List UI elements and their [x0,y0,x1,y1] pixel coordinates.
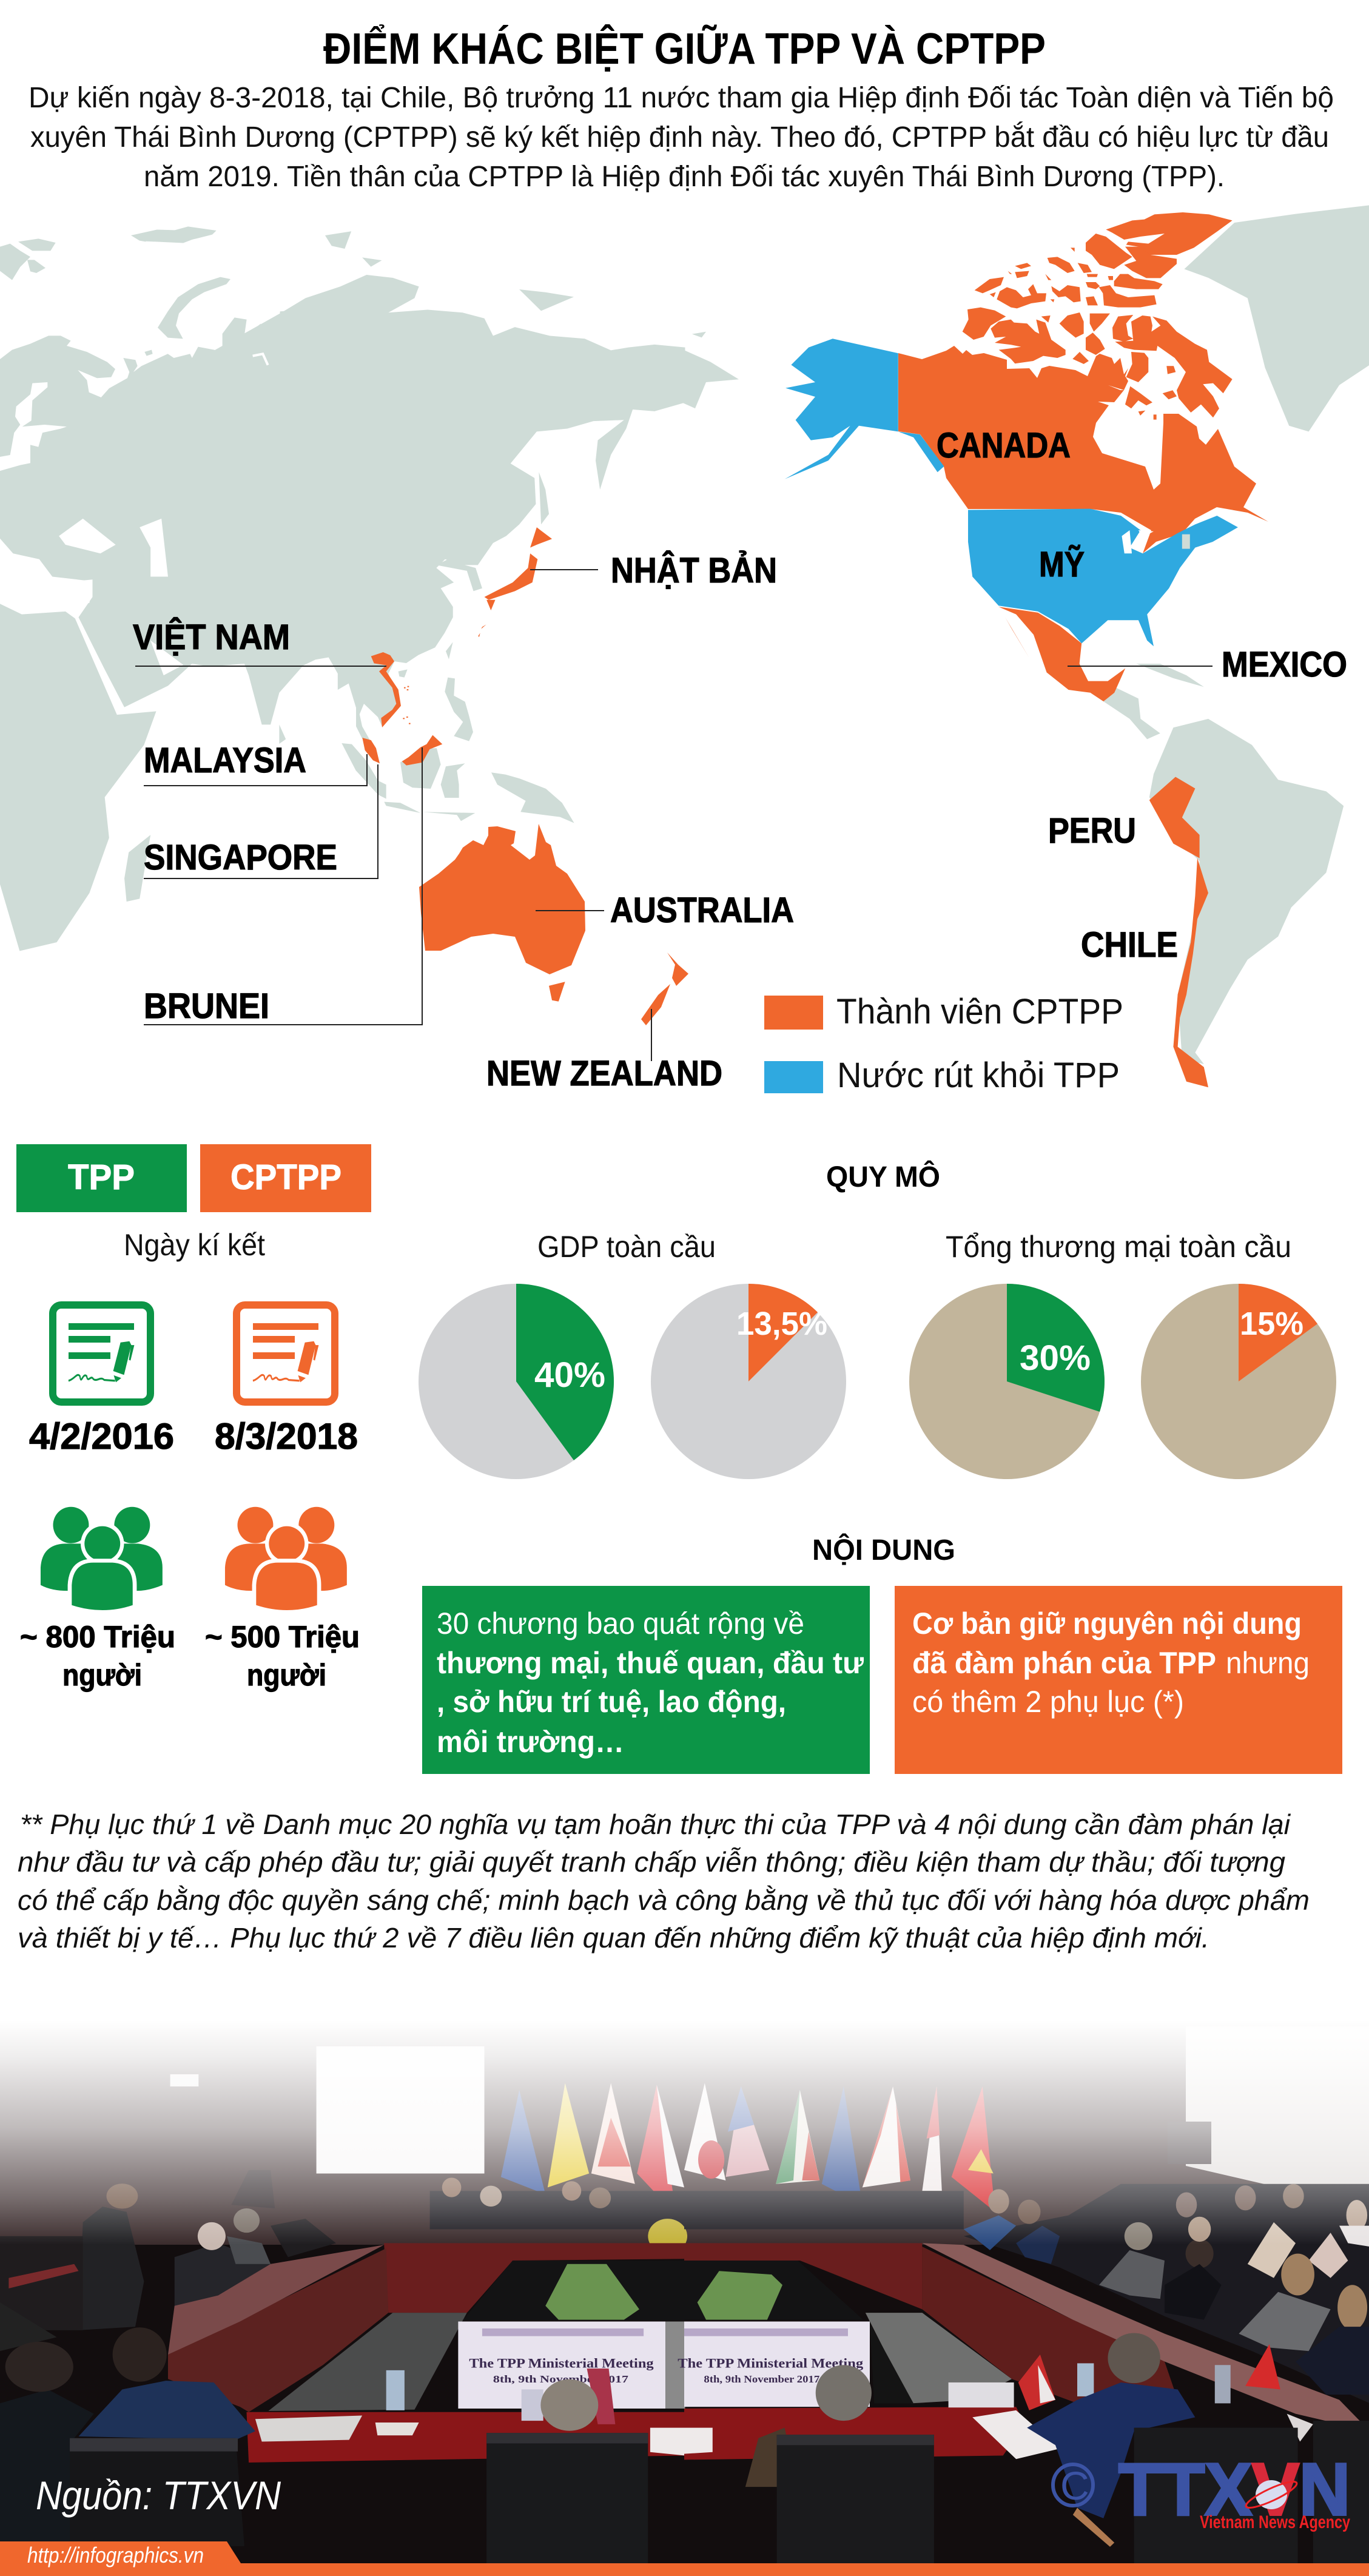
logo: copyright mark: C [1060,2463,1089,2508]
intro text block: năm 2019. Tiền thân của CPTPP là Hiệp định Đối tác xuyên Thái Bình Dương (TPP). [144,161,1225,193]
photo: delegate in blue suit [1027,2333,1195,2518]
country label: Peru: PERU [1048,811,1136,851]
TPP population: ~ 800 Triệu [20,1620,175,1654]
pie chart: TPP trade 30% [909,1284,1105,1479]
footnote text block: như đầu tư và cấp phép đầu tư; giải quyết tranh chấp viễn thông; điều kiện tham dự thầu; đối tượng [18,1846,1285,1878]
country label: Mexico: MEXICO [1222,645,1347,684]
intro text block: Dự kiến ngày 8-3-2018, tại Chile, Bộ trưởng 11 nước tham gia Hiệp định Đối tác Toàn diện và Tiến bộ [29,82,1334,114]
logo: globe [1243,2477,1299,2512]
photo: meeting banner right: The TPP Ministerial Meeting [678,2356,864,2371]
map: Canada mainland [898,346,1268,553]
CPTPP signing date: 8/3/2018 [215,1416,358,1457]
photo: grey-haired delegate and chair [486,2379,648,2563]
photo: back table face right [684,2243,922,2309]
map: Greenland and the American land [682,205,1369,1064]
country label: Chile: CHILE [1081,925,1178,965]
header: TPP [16,1144,187,1212]
photo: card, flags and bottles near table right [684,2344,1313,2459]
heading: Nội dung: NỘI DUNG [812,1533,955,1566]
country label: Singapore: SINGAPORE [144,838,337,877]
pie chart: TPP GDP 40%: 40% [534,1355,605,1395]
header: CPTPP: CPTPP [230,1158,341,1197]
signing date heading: Ngày kí kết [124,1228,265,1262]
pie chart: TPP GDP 40% [419,1284,614,1479]
content box: TPP: môi trường… [437,1725,624,1759]
pie chart: CPTPP trade 15%: 15% [1240,1306,1303,1342]
TPP signing date: 4/2/2016 [29,1416,174,1457]
content box: TPP: , sở hữu trí tuệ, lao động, [437,1685,786,1719]
photo: delegates right [964,2184,1369,2403]
photo: centre planter right [684,2261,863,2320]
country label: Australia: AUSTRALIA [610,891,794,930]
icon: TPP signed document [53,1305,150,1402]
photo: lift sign [170,2074,198,2086]
logo: TTXVN [1053,2448,1350,2532]
map: inland seas [0,519,183,675]
content box: TPP: thương mại, thuế quan, đầu tư [437,1646,864,1680]
CPTPP population: người [247,1658,326,1692]
logo: wordmark: TTXVN [1118,2448,1350,2530]
map: USA in blue [785,339,1238,646]
photo: standing delegate [78,2183,144,2330]
photo: meeting banner left: 8th, 9th November 2017 [493,2374,628,2385]
photo: carpet right [866,2313,1012,2403]
footnote text block: có thể cấp bằng độc quyền sáng chế; minh bạch và công bằng về thủ tục đối với hàng hóa dược phẩm [18,1884,1310,1916]
photo: foreground chairs right [1073,2421,1369,2565]
footer bar with URL tab [0,2541,1369,2576]
map: Japan [485,527,565,1002]
CPTPP population: ~ 500 Triệu [205,1620,360,1654]
title: ĐIỂM KHÁC BIỆT GIỮA TPP VÀ CPTPP [323,24,1046,73]
photo: left half of the room [0,2046,687,2563]
photo: meeting banner right [678,2322,913,2407]
photo: left table side [168,2248,388,2412]
photo: flags on left [501,2083,684,2215]
country label: Brunei: BRUNEI [144,986,269,1026]
photo: papers and water on the near table [255,2369,685,2456]
photo: back-row delegates left [430,2177,687,2254]
photo: back table face [384,2243,685,2313]
content box: CPTPP: nhưng [1226,1646,1310,1680]
country label: New Zealand: NEW ZEALAND [486,1054,722,1093]
icon: CPTPP population group [225,1507,347,1612]
header: CPTPP [200,1144,371,1212]
map: northern Europe and Arctic islands [0,226,323,485]
photo: right half of the room [678,2083,1369,2565]
content box: TPP [422,1586,870,1774]
country label: Việt Nam: VIỆT NAM [133,618,290,657]
icon: CPTPP signed document [237,1305,335,1402]
map: Mexico, Peru and Chile [998,607,1208,1087]
photo: near table top left [246,2412,685,2463]
photo: back-row delegates right [684,2191,964,2229]
content box: CPTPP: Cơ bản giữ nguyên nội dung [912,1607,1302,1640]
map: Canadian Arctic islands [963,212,1233,420]
photo: projection screen [317,2046,485,2174]
photo: flags on right [684,2083,995,2212]
content box: TPP: 30 chương bao quát rộng về [437,1607,804,1640]
photo: grey-haired delegate and chair right [745,2365,934,2565]
legend: Thành viên CPTPP [836,992,1123,1031]
panel: content (Nội dung) [422,1533,1342,1774]
photo: right table side [922,2247,1178,2403]
photo: left table top with papers [168,2245,384,2355]
pie chart: CPTPP GDP 13.5% [651,1284,846,1479]
footnote text block [18,1809,1310,1954]
TPP population [20,1620,175,1692]
panel: world map [0,205,1369,1095]
photo: meeting banner left: The TPP Ministerial Meeting [469,2356,654,2371]
pie chart: TPP trade 30%: 30% [1020,1338,1091,1378]
photo: foreground delegates left [0,2327,255,2546]
map: Vietnam, Malaysia and Brunei [362,624,486,766]
intro text block [29,82,1334,193]
panel: TPP vs CPTPP comparison column [16,1144,371,1692]
photo: white fade at top [0,2020,1369,2245]
photo: TPP ministerial meeting room [0,2020,1369,2565]
country label: Canada: CANADA [937,426,1071,465]
photo: right table top with papers [922,2243,1369,2431]
map: CPTPP member countries in orange [362,212,1268,1087]
map: Eurasia [0,229,685,902]
map: Africa [0,603,156,951]
photo: near table top right [684,2407,1025,2460]
country label: Nhật Bản: NHẬT BẢN [611,551,777,590]
icon: TPP population group [41,1507,163,1612]
legend [764,992,1123,1095]
CPTPP population [205,1620,360,1692]
panel: scale (Quy mô) [419,1160,1336,1479]
footer bar with URL tab: http://infographics.vn [27,2543,204,2568]
TPP population: người [62,1658,142,1692]
legend: Nước rút khỏi TPP [837,1056,1120,1095]
country label: Malaysia: MALAYSIA [144,741,306,780]
leader lines for country labels [135,570,1213,1061]
country label: Mỹ: MỸ [1039,545,1085,584]
footnote text block: và thiết bị y tế… Phụ lục thứ 2 về 7 điều liên quan đến những điểm kỹ thuật của hiệp định mới. [18,1922,1209,1954]
footnote text block: ** Phụ lục thứ 1 về Danh mục 20 nghĩa vụ tạm hoãn thực thi của TPP và 4 nội dung cần đàm phán lại [20,1809,1291,1840]
map: Southeast Asia islands [341,642,574,823]
photo: centre planter [463,2261,685,2321]
photo: room background [0,2020,1369,2563]
photo: carpet left [268,2313,467,2411]
intro text block: xuyên Thái Bình Dương (CPTPP) sẽ ký kết hiệp định này. Theo đó, CPTPP bắt đầu có hiệu lực từ đầu [30,121,1329,153]
photo: meeting banner right: 8th, 9th November 2017 [704,2374,819,2385]
map: New Zealand [641,953,688,1025]
pie chart: CPTPP trade 15% [1141,1284,1336,1479]
content box: CPTPP [895,1586,1342,1774]
pie chart: CPTPP GDP 13.5%: 13,5% [736,1306,827,1342]
header: TPP: TPP [68,1158,135,1197]
map: Baltic sea and Ob gulf [0,354,268,471]
subheading: trade: Tổng thương mại toàn cầu [946,1230,1291,1264]
photo: seated delegates left [0,2170,336,2351]
content box: CPTPP: đã đàm phán của TPP [912,1646,1216,1680]
photo: meeting banner left [458,2322,685,2409]
source line: Nguồn: TTXVN [36,2473,281,2518]
heading: Quy mô: QUY MÔ [826,1160,940,1193]
subheading: GDP: GDP toàn cầu [537,1230,716,1264]
content box: CPTPP: có thêm 2 phụ lục (*) [912,1685,1184,1719]
map: Australia [419,824,585,974]
